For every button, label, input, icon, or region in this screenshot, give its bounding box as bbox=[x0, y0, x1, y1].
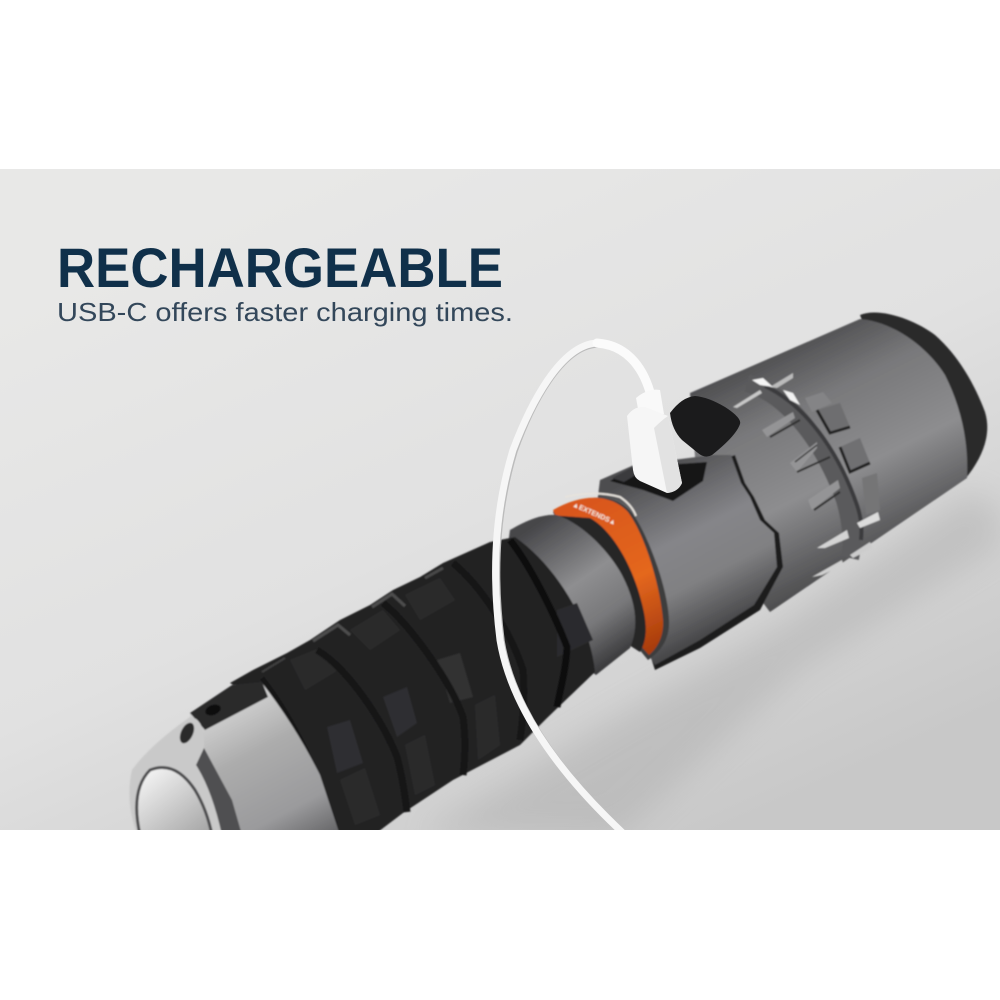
white ring edge bbox=[596, 492, 638, 518]
neck section bbox=[590, 455, 777, 665]
grip grooves bbox=[262, 678, 337, 830]
lanyard slot bbox=[179, 722, 195, 744]
flashlight shadow bbox=[420, 490, 1000, 835]
tail barrel bbox=[190, 683, 340, 835]
dial square knurls bbox=[819, 404, 849, 432]
orange ring bbox=[553, 498, 663, 655]
photo panel: grey background with flashlight bbox=[0, 169, 1000, 838]
panel background bbox=[0, 169, 1000, 830]
extends label: ▲EXTENDS▲ bbox=[571, 501, 617, 527]
tail dark top bbox=[190, 682, 268, 730]
cable shadow edge bbox=[499, 346, 598, 757]
usb plug bbox=[627, 390, 682, 493]
tail disc bbox=[137, 768, 212, 835]
title: RECHARGEABLE bbox=[57, 236, 503, 299]
usb cable bbox=[496, 343, 650, 836]
cable thin loop bbox=[496, 343, 625, 835]
outer ring dark bbox=[553, 498, 669, 660]
knurled dial ring bbox=[733, 373, 880, 577]
rubber port flap bbox=[670, 396, 740, 457]
cable thick end bbox=[597, 343, 650, 392]
usb port recess bbox=[610, 462, 707, 501]
flashlight bbox=[129, 313, 987, 838]
head cap bbox=[860, 313, 987, 478]
grip top highlights bbox=[313, 625, 350, 641]
dial light slots bbox=[733, 390, 762, 408]
head barrel bbox=[690, 319, 967, 612]
dial band bbox=[747, 383, 852, 558]
inner dark ring bbox=[548, 515, 646, 652]
tail bezel bbox=[129, 717, 226, 835]
tail bezel shade bbox=[196, 748, 242, 835]
tail hole bbox=[206, 704, 220, 716]
usb port outline bbox=[613, 467, 635, 482]
subtitle: USB-C offers faster charging times. bbox=[57, 297, 513, 327]
grip rings: facets bbox=[262, 540, 593, 830]
grip bbox=[230, 537, 595, 838]
bezel section bbox=[500, 515, 635, 675]
dial tapered slots bbox=[762, 412, 795, 437]
neck dark backing bbox=[651, 454, 784, 671]
